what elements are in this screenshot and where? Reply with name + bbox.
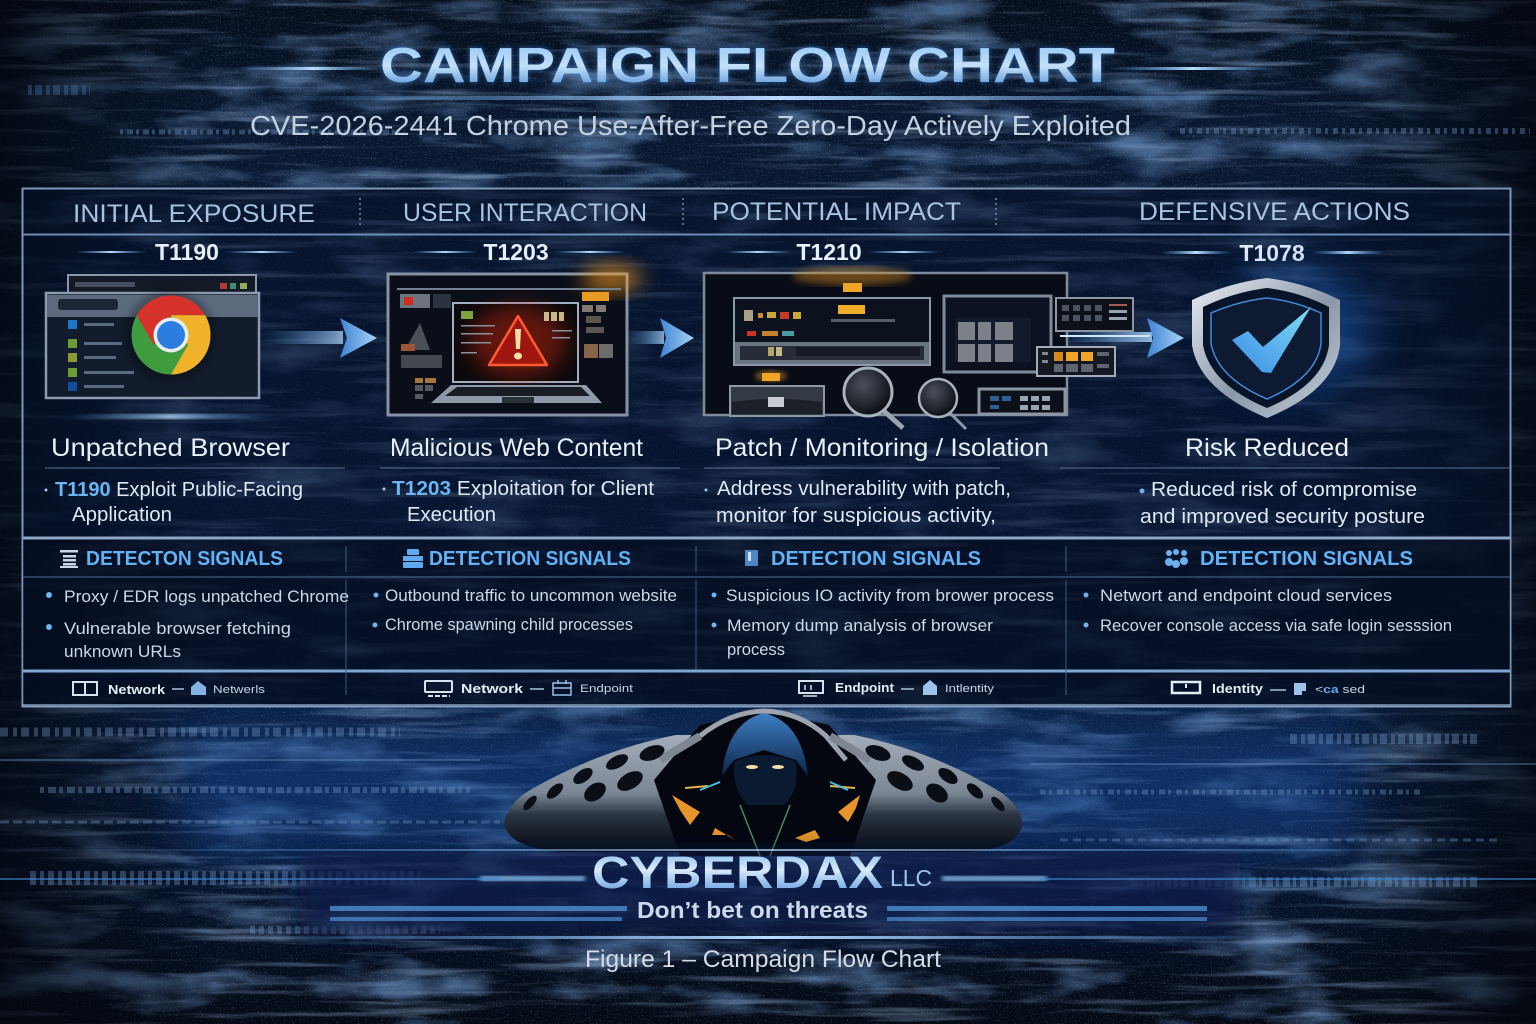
source row 3: Endpoint (835, 680, 895, 695)
step text: T1190 (44, 479, 303, 526)
detection list 4: Recover console access via safe login sesssion (1100, 616, 1452, 635)
detection list 1: Proxy / EDR logs unpatched Chrome (64, 587, 349, 606)
detection list 3: Suspicious IO activity from brower process (726, 586, 1054, 605)
source row 3: Intlentity (945, 683, 995, 695)
detection list 3: Memory dump analysis of browser (727, 616, 993, 635)
detection list 4: Networt and endpoint cloud services (1100, 586, 1392, 605)
technique T1078 (1160, 240, 1384, 266)
logo wordmark: LLC (890, 865, 932, 891)
detection list 2 (372, 586, 677, 634)
detection heading 3: DETECTION SIGNALS (771, 548, 981, 570)
source row 1 (73, 681, 266, 697)
icon: monitoring screens and magnifiers (704, 267, 1133, 429)
step title: unpatched browser: Unpatched Browser (51, 434, 290, 462)
figure caption: Figure 1 – Campaign Flow Chart (585, 946, 941, 973)
source row 4 (1172, 681, 1365, 696)
column heading: defensive actions: DEFENSIVE ACTIONS (1139, 198, 1410, 226)
detection list 3: process (727, 640, 785, 659)
step text: patch (704, 478, 1011, 527)
tagline: Don’t bet on threats (637, 897, 868, 923)
logo wordmark: CYBERDAX (592, 847, 883, 898)
step text: reduced risk: and improved security posture (1140, 506, 1425, 528)
main flow panel (22, 188, 1510, 706)
technique T1078: T1078 (1239, 240, 1305, 266)
title with glow lines: CAMPAIGN FLOW CHART (380, 39, 1115, 93)
source row 4: Identity (1212, 681, 1264, 696)
step text: T1203 (382, 478, 654, 526)
column heading: potential impact: POTENTIAL IMPACT (712, 198, 961, 226)
column heading: initial exposure: INITIAL EXPOSURE (73, 200, 315, 228)
detection list 4 (1084, 586, 1452, 635)
detection list 1: Vulnerable browser fetching (64, 619, 291, 638)
icon: laptop with warning (388, 264, 642, 415)
glow line below browser (70, 414, 270, 419)
title with glow lines: CAMPAIGN FLOW CHART (380, 39, 1115, 93)
source row 2 (425, 680, 633, 696)
detection list 3 (712, 586, 1054, 659)
source row 2: Network (461, 681, 524, 696)
detection list 2: Outbound traffic to uncommon website (385, 586, 677, 605)
step text: reduced risk: Reduced risk of compromise (1151, 479, 1417, 501)
source row 1: Network (108, 682, 166, 697)
step title: patch monitoring isolation: Patch / Monitoring / Isolation (715, 434, 1049, 462)
source row 2: Endpoint (580, 683, 633, 695)
technique T1190: T1190 (155, 239, 219, 265)
step title: malicious web content: Malicious Web Content (390, 434, 643, 462)
step text: patch: monitor for suspicious activity, (716, 505, 996, 527)
icon: shield with check mark (1192, 270, 1370, 418)
rules around logo (0, 849, 1536, 939)
step text: T1190: T1190 Exploit Public-Facing (55, 479, 303, 501)
step text: patch: Address vulnerability with patch, (717, 478, 1011, 500)
step text: T1203: Execution (407, 504, 496, 526)
emblem: hooded figure with wings (505, 711, 1022, 856)
column heading: user interaction: USER INTERACTION (403, 199, 647, 227)
arrow: exposure to interaction (263, 318, 377, 358)
step text: T1203: T1203 Exploitation for Client (392, 478, 654, 500)
detection list 1: unknown URLs (64, 642, 181, 661)
title with glow lines (240, 39, 1300, 100)
detection heading 2: DETECTION SIGNALS (429, 548, 631, 570)
arrow: interaction to impact (628, 318, 694, 358)
detection list 2: Chrome spawning child processes (385, 615, 633, 634)
step title: risk reduced: Risk Reduced (1185, 434, 1349, 462)
source row 1: Netwerls (213, 684, 266, 696)
light rule above emblem (22, 704, 1510, 707)
detection heading 4: DETECTION SIGNALS (1200, 548, 1413, 570)
detection heading 1: DETECTON SIGNALS (86, 548, 283, 570)
source row 4: <ca sed (1315, 684, 1365, 696)
step text: reduced risk (1140, 479, 1425, 528)
detection list 1 (46, 587, 349, 661)
icon: browser windows with chrome logo (46, 275, 259, 398)
arrow: impact to defensive (1060, 318, 1184, 358)
technique T1210: T1210 (796, 239, 862, 265)
technique T1203: T1203 (483, 239, 549, 265)
subtitle: CVE-2026-2441 Chrome Use-After-Free Zero-Day Actively Exploited (250, 110, 1131, 141)
source row 3 (799, 680, 995, 696)
logo band backdrop (300, 852, 1240, 936)
step text: T1190: Application (72, 504, 172, 526)
